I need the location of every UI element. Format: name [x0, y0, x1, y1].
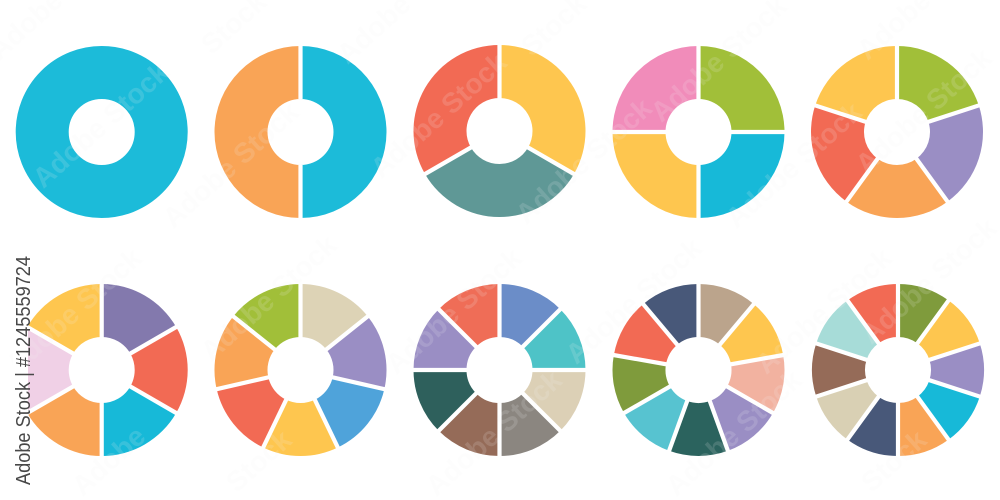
segment: red	[811, 105, 878, 202]
segment: yellow	[917, 300, 980, 360]
segment: purple	[710, 386, 773, 451]
segment: dark green	[414, 370, 476, 431]
watermark: repeated Adobe Stock text: Adobe Stock	[560, 232, 708, 370]
segment: teal	[523, 309, 586, 370]
segment: orange	[215, 316, 275, 389]
segment: red	[847, 284, 898, 343]
segment: cyan	[624, 386, 687, 451]
segment: beige	[523, 370, 586, 431]
segment: yellow	[720, 304, 783, 364]
donut chart: 10 segments	[812, 280, 984, 460]
segment: green	[698, 46, 784, 132]
watermark: repeated Adobe Stock text: Adobe Stock	[380, 242, 528, 380]
watermark: repeated Adobe Stock text: Adobe Stock	[855, 212, 1000, 350]
segment: blue	[315, 377, 384, 447]
segment: purple	[326, 316, 386, 389]
segment: red	[439, 284, 500, 347]
segment: red	[130, 327, 188, 413]
segment: orange	[27, 386, 102, 456]
segment: green	[233, 284, 300, 349]
segment: red	[413, 45, 500, 174]
segment: salmon	[727, 355, 784, 413]
segment: green	[897, 46, 979, 122]
segment: dark green	[669, 401, 728, 456]
segment: navy	[643, 284, 698, 345]
segment: orange	[898, 397, 949, 456]
segment: tan	[698, 284, 754, 345]
watermark: repeated Adobe Stock text: Adobe Stock	[510, 92, 658, 230]
watermark: repeated Adobe Stock text: Adobe Stock	[660, 364, 808, 500]
watermark: repeated Adobe Stock text: Adobe Stock	[0, 242, 148, 380]
segment: pink	[612, 46, 698, 132]
segment: violet	[102, 284, 176, 354]
segment: beige	[300, 284, 368, 349]
donut chart: 1 segment	[42, 72, 161, 192]
segment: yellow	[815, 46, 897, 122]
watermark: repeated Adobe Stock text: Adobe Stock	[365, 46, 513, 184]
watermark: repeated Adobe Stock text: Adobe Stock	[195, 229, 343, 367]
segment: orange	[846, 159, 948, 218]
segment: yellow	[27, 284, 102, 354]
donut chart: 4 segments	[608, 42, 788, 222]
watermark: repeated Adobe Stock text: Stock	[220, 424, 298, 498]
segment: red	[217, 377, 286, 447]
segment: navy	[847, 397, 898, 456]
segment: yellow	[612, 132, 698, 218]
segment: blue	[102, 386, 176, 456]
segment: blue	[500, 284, 560, 347]
segment: blue	[698, 132, 784, 218]
segment: brown	[439, 393, 500, 456]
donut chart: 3 segments	[413, 41, 586, 217]
segment: mint	[816, 300, 879, 360]
donut chart: 7 segments	[213, 280, 388, 456]
watermark: repeated Adobe Stock text: Adobe Stock	[720, 96, 868, 234]
watermark: repeated Adobe Stock text: Adobe Stock	[420, 364, 568, 500]
segment 1: blue	[42, 72, 161, 192]
watermark: repeated Adobe Stock text: Adobe Stock	[750, 242, 898, 380]
watermark: repeated Adobe Stock text: Adobe Stock	[27, 56, 175, 194]
donut chart: 2 segments	[214, 46, 386, 218]
segment: yellow	[263, 400, 338, 456]
segment: purple	[916, 105, 983, 202]
segment: purple	[929, 343, 984, 397]
segment: beige	[816, 380, 879, 440]
segment: cyan	[917, 380, 980, 440]
segment: yellow	[500, 45, 586, 174]
segment: orange	[214, 46, 300, 218]
segment: blue	[300, 46, 386, 218]
segment: teal	[425, 148, 574, 217]
segment: grey	[500, 393, 560, 456]
watermark: repeated Adobe Stock text: Adobe Stock	[157, 96, 305, 234]
donut chart: 5 segments	[811, 42, 983, 218]
donut chart: 9 segments	[610, 280, 787, 456]
segment: olive	[613, 355, 670, 413]
segment: pale pink	[16, 327, 73, 413]
donut chart: 8 segments	[410, 280, 590, 460]
segment: brown	[812, 343, 867, 397]
segment: purple	[414, 309, 476, 370]
watermark: repeated Adobe Stock text: Stock	[855, 424, 933, 498]
segment: red	[614, 304, 677, 364]
watermark: repeated Adobe Stock text: Adobe Stock	[850, 42, 998, 180]
watermark: repeated Adobe Stock text: Adobe	[66, 420, 151, 500]
donut chart: 6 segments	[16, 280, 188, 460]
segment: olive	[898, 284, 949, 343]
image credit: vertical stock ID: Adobe Stock | #1245559724	[13, 256, 35, 485]
